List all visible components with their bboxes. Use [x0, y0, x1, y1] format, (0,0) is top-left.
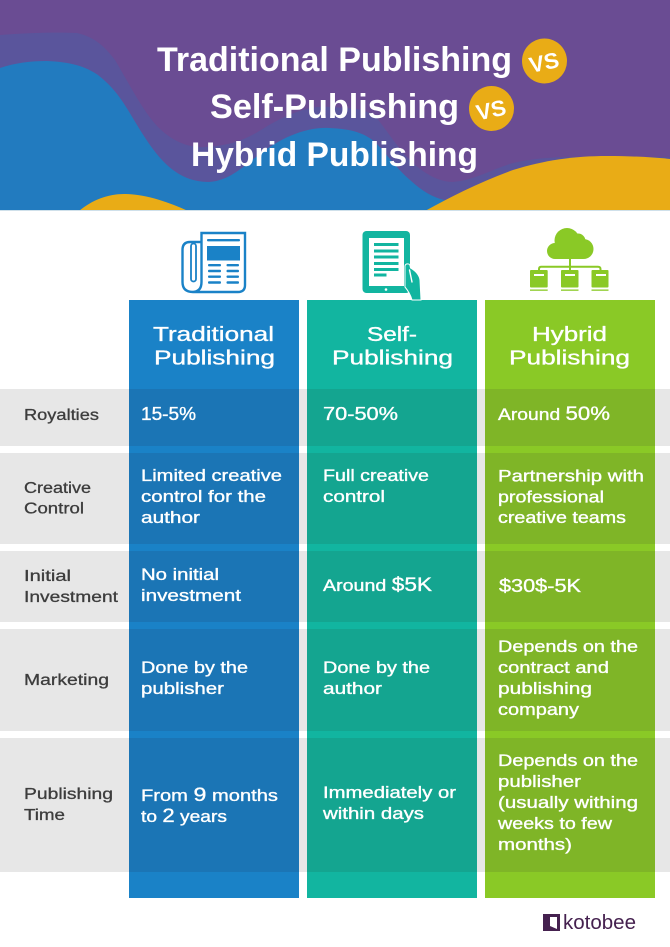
column: traditional publishing: publisher: [141, 680, 225, 698]
row labels: Marketing: [24, 672, 109, 689]
row labels: Investment: [24, 589, 119, 606]
row labels: Royalties: [24, 407, 99, 424]
column: self-publishing: control: [323, 488, 385, 506]
row backgrounds: [0, 389, 670, 872]
column: traditional publishing: Done by the: [141, 659, 248, 677]
title: Traditional Publishing: [157, 41, 512, 79]
column: hybrid publishing: Hybrid: [532, 323, 607, 346]
logo: kotobee: kotobee: [563, 912, 636, 934]
title: Hybrid Publishing: [191, 136, 478, 174]
column: hybrid publishing: weeks to few: [497, 815, 612, 833]
column: self-publishing: Immediately or: [323, 784, 457, 802]
column: traditional publishing: investment: [141, 587, 242, 605]
column: self-publishing: Self-: [367, 323, 417, 346]
column: self-publishing: Publishing: [332, 346, 453, 370]
vs badge 2: VS: [474, 95, 508, 125]
row labels: Publishing: [24, 786, 113, 803]
column: hybrid publishing: (usually withing: [498, 794, 638, 812]
column: traditional publishing: Traditional: [153, 323, 274, 346]
column: hybrid publishing: company: [498, 701, 580, 719]
column: self-publishing: Done by the: [323, 659, 430, 677]
column: hybrid publishing: [485, 300, 655, 898]
column: hybrid publishing: creative teams: [498, 509, 626, 527]
column: self-publishing: Full creative: [323, 467, 429, 485]
column: self-publishing: author: [323, 680, 383, 698]
column: traditional publishing: author: [141, 509, 201, 527]
column: hybrid publishing: contract and: [498, 659, 609, 677]
column: hybrid publishing: Publishing: [509, 346, 630, 370]
column: self-publishing: [307, 300, 477, 898]
row labels: Creative: [24, 480, 91, 497]
column: traditional publishing: control for the: [141, 488, 266, 506]
row labels: [24, 407, 119, 824]
title: Self-Publishing: [210, 88, 459, 126]
row labels: Time: [24, 807, 65, 824]
column: hybrid publishing: months): [498, 836, 572, 854]
row labels: Initial: [24, 568, 71, 585]
column: traditional publishing: [129, 300, 299, 898]
column: traditional publishing: No initial: [141, 566, 219, 584]
icon: newspaper: [182, 233, 245, 292]
column: traditional publishing: Publishing: [154, 346, 275, 370]
header banner: [0, 0, 670, 211]
column: self-publishing: 70-50%: [323, 404, 398, 424]
vs badge 1: VS: [527, 47, 561, 78]
column: self-publishing: within days: [322, 805, 424, 823]
vs badge 2: [469, 86, 514, 131]
column: hybrid publishing: professional: [498, 488, 604, 506]
column: hybrid publishing: Depends on the: [498, 638, 638, 656]
column: traditional publishing: Limited creative: [141, 467, 282, 485]
column: hybrid publishing: $30$-5K: [499, 575, 582, 596]
icon: cloud network: [530, 228, 608, 291]
title: [157, 41, 512, 174]
column: traditional publishing: to 2 years: [141, 806, 227, 827]
column: traditional publishing: From 9 months: [141, 785, 278, 806]
icon: tablet with hand: [362, 231, 421, 300]
column: hybrid publishing: Depends on the: [498, 752, 638, 770]
row labels: Control: [24, 500, 84, 518]
column: self-publishing: Around $5K: [323, 575, 432, 596]
column: hybrid publishing: publisher: [498, 773, 582, 791]
column: hybrid publishing: Partnership with: [498, 468, 644, 486]
vs badge 1: [522, 38, 567, 84]
column: hybrid publishing: publishing: [498, 680, 592, 698]
column: hybrid publishing: Around 50%: [498, 404, 610, 425]
column: traditional publishing: 15-5%: [141, 404, 196, 424]
